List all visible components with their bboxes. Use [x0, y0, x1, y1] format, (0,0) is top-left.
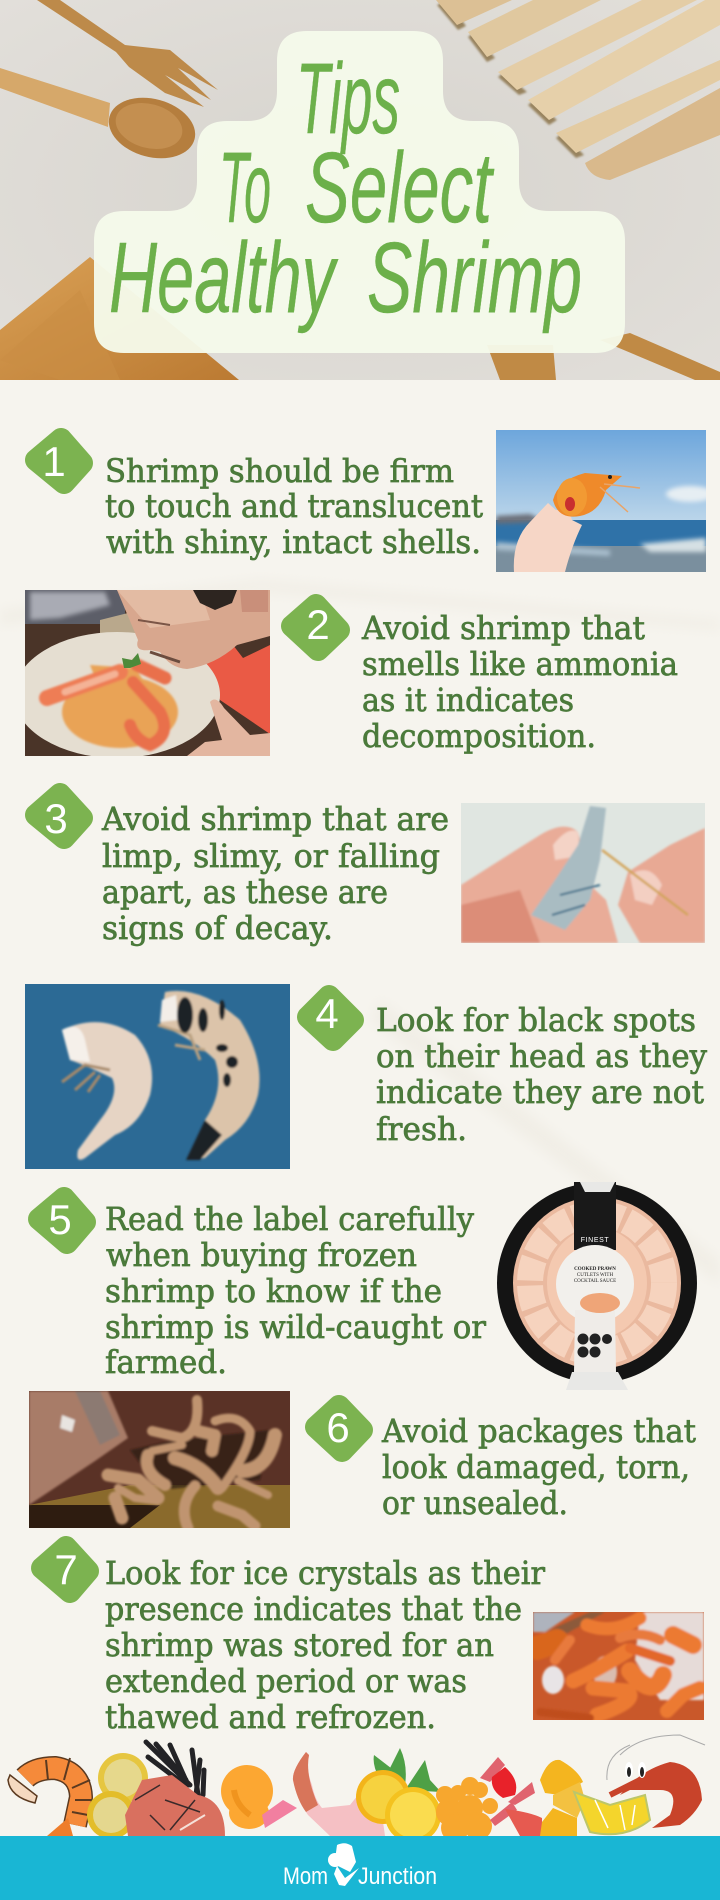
tip 5 [39, 1182, 697, 1390]
text 7: shrimp was stored for an [105, 1628, 494, 1664]
text 2: Avoid shrimp that [361, 611, 645, 647]
badge 6: 6 [326, 1404, 350, 1451]
text 3: apart, as these are [102, 875, 388, 911]
icon: slotted spatula [487, 333, 720, 380]
text 4: fresh. [376, 1112, 467, 1148]
text 3: Avoid shrimp that are [101, 802, 449, 838]
title: Healthy [109, 222, 339, 334]
text 6: or unsealed. [382, 1486, 568, 1522]
badge 5: 5 [48, 1196, 72, 1243]
text 7: Look for ice crystals as their [105, 1556, 546, 1592]
photo: fresh and black-spotted shrimp [25, 984, 290, 1169]
logo: MomJunction: Junction [358, 1863, 437, 1890]
text 4: Look for black spots [376, 1003, 696, 1039]
illustration: mint leaves [374, 1748, 441, 1792]
badge 4: 4 [315, 990, 339, 1037]
badge 2: 2 [306, 601, 330, 648]
text 1: to touch and translucent [105, 489, 483, 525]
text 1 [105, 454, 483, 561]
photo: hands deveining shrimp [461, 803, 705, 943]
tip 3 [36, 794, 705, 947]
illustration: lemon slices [87, 1753, 148, 1839]
badge 5 [39, 1196, 85, 1243]
text 3 [101, 802, 449, 947]
illustration: red and salmon shrimp [492, 1767, 542, 1836]
illustration: lemon halves [356, 1770, 440, 1836]
logo: MomJunction: Mom [283, 1863, 328, 1890]
illustration: pale pink shrimp [293, 1752, 385, 1836]
food illustrations strip [8, 1735, 705, 1843]
photo: packaged prawn ring: CUTLETS WITH [577, 1273, 613, 1278]
illustration: orange cartoon shrimp [221, 1765, 297, 1829]
icon: wooden fork [37, 0, 218, 107]
text 5: farmed. [105, 1345, 227, 1381]
photo: packaged prawn ring: COCKTAIL SAUCE [574, 1279, 616, 1284]
photo: dried shrimp spilling from jar [29, 1391, 290, 1528]
title: Select [305, 132, 495, 244]
text 2: smells like ammonia [362, 647, 678, 683]
photo: packaged prawn ring [497, 1182, 697, 1390]
tip 1 [36, 430, 714, 572]
text 7: presence indicates that the [105, 1592, 522, 1628]
footer bar [0, 1836, 720, 1900]
badge 7: 7 [54, 1546, 78, 1593]
text 2: decomposition. [362, 719, 596, 755]
photo: shrimp on ice [533, 1612, 704, 1720]
icon: cutting board [0, 257, 239, 380]
text 5: Read the label carefully [105, 1202, 474, 1238]
logo: MomJunction [283, 1843, 437, 1890]
photo: packaged prawn ring: FINEST [581, 1237, 609, 1244]
text 1: with shiny, intact shells. [106, 525, 481, 561]
illustration: yellow crescent shrimp [540, 1760, 585, 1836]
icon: bamboo trivet [436, 0, 720, 180]
text 5: when buying frozen [106, 1238, 417, 1274]
photo: packaged prawn ring: COOKED PRAWN [574, 1267, 616, 1272]
icon: wooden spoon [0, 68, 196, 158]
tip 6 [29, 1391, 696, 1528]
badge 7 [42, 1546, 88, 1593]
title panel [94, 31, 625, 353]
text 7 [105, 1556, 546, 1736]
tip 4 [25, 984, 707, 1169]
badge 4 [308, 990, 353, 1040]
badge 6 [316, 1404, 362, 1451]
header photo: bamboo utensils [0, 0, 720, 380]
text 2: as it indicates [362, 683, 574, 719]
text 7: extended period or was [105, 1664, 467, 1700]
photo: man smelling shrimp pasta [14, 590, 270, 758]
icon: mother and child [328, 1843, 359, 1886]
tip 2 [14, 590, 678, 758]
text 5 [105, 1202, 487, 1381]
text 6: look damaged, torn, [382, 1450, 690, 1486]
title [109, 43, 582, 334]
title: Shrimp [367, 222, 582, 334]
text 1: Shrimp should be firm [105, 454, 454, 490]
text 7: thawed and refrozen. [105, 1700, 436, 1736]
illustration: striped orange shrimp [8, 1758, 92, 1836]
badge 3: 3 [44, 795, 68, 842]
photo: hand holding shrimp at beach [496, 430, 714, 572]
illustration: tempura prawns [436, 1757, 535, 1842]
text 4 [376, 1003, 707, 1148]
text 5: shrimp to know if the [105, 1274, 442, 1310]
text 6: Avoid packages that [381, 1414, 696, 1450]
badge 1: 1 [42, 438, 66, 485]
illustration: rosemary sprig [146, 1742, 204, 1795]
text 4: on their head as they [376, 1039, 707, 1075]
title: To [219, 132, 271, 244]
text 6 [381, 1414, 696, 1522]
title: Tips [296, 43, 400, 155]
text 5: shrimp is wild-caught or [105, 1310, 487, 1346]
text 3: limp, slimy, or falling [102, 839, 440, 875]
badge 3 [36, 794, 82, 842]
badge 2 [292, 601, 339, 650]
text 2 [361, 611, 678, 755]
illustration: cartoon red shrimp with lemon [574, 1735, 705, 1834]
badge 1 [36, 438, 82, 485]
text 3: signs of decay. [102, 911, 333, 947]
illustration: pink prawn [125, 1775, 225, 1836]
text 4: indicate they are not [376, 1075, 704, 1111]
tip 7 [42, 1546, 704, 1736]
